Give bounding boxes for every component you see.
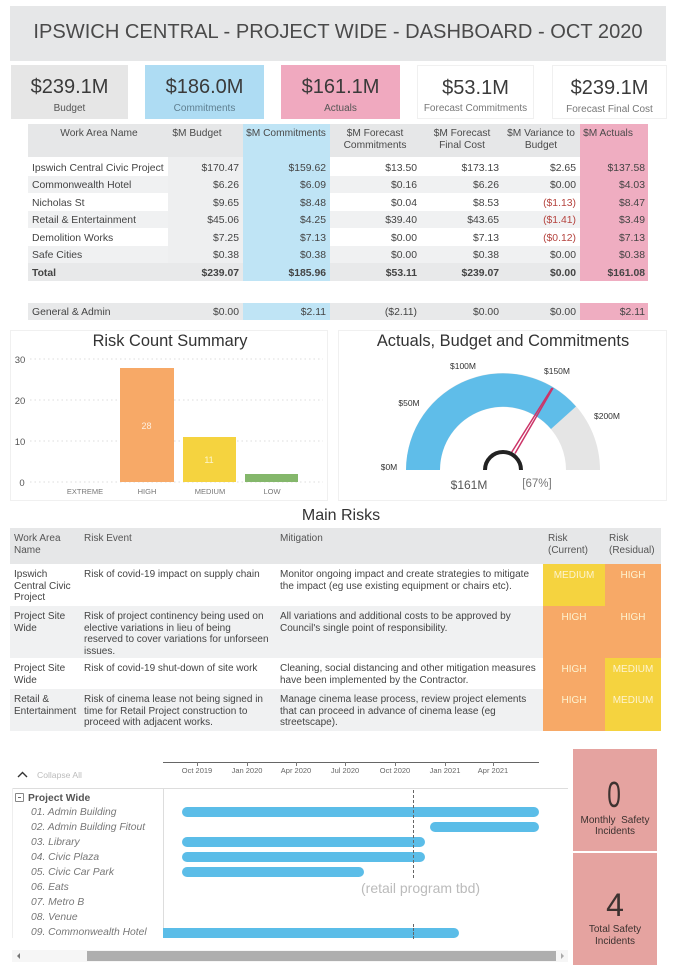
- KPI card: commitments: [145, 65, 264, 119]
- row: Total: $53.11: [386, 268, 417, 279]
- risk row 3: [14, 658, 661, 689]
- row: Safe Cities: $0.00: [391, 250, 417, 261]
- risk row 4: Entertainment: [14, 706, 76, 716]
- table header: $M Commitments: [246, 128, 326, 139]
- risk row 3: Cleaning, social distancing and other mitigation measures: [280, 663, 536, 674]
- timeline labels: Jan 2021: [430, 766, 460, 775]
- risk row 1: Risk of covid-19 impact on supply chain: [84, 569, 260, 580]
- row: Ipswich Central Civic Project: $137.58: [607, 163, 645, 174]
- risk row 4: Manage cinema lease process, review project elements: [280, 694, 526, 705]
- risk row 2: Wide: [14, 622, 37, 634]
- row: Safe Cities: $0.38: [213, 250, 239, 261]
- bar: HIGH 28: 28: [141, 421, 152, 431]
- table header: Final Cost: [439, 140, 485, 150]
- heading: Main Risks: Main Risks: [302, 507, 380, 524]
- risk table header: Mitigation: [280, 533, 323, 544]
- card: total safety incidents: 4: [606, 887, 624, 923]
- row: Nicholas St: $0.04: [391, 198, 417, 209]
- card: monthly safety incidents: Monthly Safety: [581, 815, 649, 826]
- table header: $M Actuals: [583, 128, 633, 139]
- risk row 1: Monitor ongoing impact and create strategies to mitigate: [280, 569, 529, 580]
- table header: $M Forecast: [347, 128, 403, 139]
- bar: MEDIUM 11: [183, 437, 236, 482]
- gauge value arc: [406, 373, 576, 470]
- cost table: [28, 124, 648, 320]
- row: Ipswich Central Civic Project: $2.65: [550, 163, 576, 174]
- note: retail program tbd: (retail program tbd): [361, 880, 480, 896]
- risk row 1: Project: [14, 592, 45, 603]
- row: Ipswich Central Civic Project: Ipswich Central Civic Project: [32, 163, 164, 174]
- risk row 2: Risk of project continency being used on: [84, 611, 264, 622]
- row: Retail & Entertainment: $4.25: [300, 215, 326, 226]
- KPI card: budget: $239.1M: [31, 76, 108, 98]
- KPI card: commitments: $186.0M: [166, 76, 243, 98]
- gantt row labels: 08. Venue: [31, 912, 78, 923]
- y axis labels: 0: [19, 478, 25, 489]
- collapse label: Collapse All: [37, 770, 82, 780]
- gantt row labels: [31, 807, 147, 938]
- risk table header: [14, 533, 655, 556]
- row: General & Admin: [32, 307, 645, 318]
- table header: $M Forecast: [434, 128, 490, 139]
- table header: $M Budget: [172, 128, 222, 139]
- row: Retail & Entertainment: $3.49: [619, 215, 645, 226]
- row: General & Admin: $2.11: [620, 307, 645, 318]
- KPI card: actuals: Actuals: [324, 103, 357, 114]
- gauge needle: [512, 388, 553, 454]
- row: General & Admin: ($2.11): [385, 307, 417, 318]
- gauge percent: [67%]: [522, 478, 552, 490]
- card: total safety incidents: Incidents: [595, 936, 635, 947]
- row: Total: Total: [32, 268, 56, 279]
- row: General & Admin: $0.00: [213, 307, 239, 318]
- x axis labels: EXTREME: [67, 487, 103, 496]
- row: Nicholas St: $8.48: [300, 198, 326, 209]
- bar: MEDIUM 11: 11: [204, 455, 214, 465]
- row: General & Admin: $0.00: [550, 307, 576, 318]
- KPI card: forecast commitments: [417, 65, 534, 119]
- timeline labels: Jan 2020: [232, 766, 262, 775]
- risk row 1: the impact (eg use existing equipment or chairs etc).: [280, 580, 512, 592]
- row: Demolition Works: $7.13: [473, 233, 499, 244]
- timeline labels: Jul 2020: [331, 766, 359, 775]
- risk row 1: Ipswich: [14, 569, 47, 580]
- row: Ipswich Central Civic Project: $13.50: [385, 163, 417, 174]
- row: Ipswich Central Civic Project: [32, 163, 645, 174]
- KPI card: forecast final cost: $239.1M: [571, 77, 648, 99]
- gauge scale labels: $0M: [381, 462, 397, 472]
- timeline labels: [182, 766, 508, 775]
- risk table header: Risk: [548, 533, 567, 544]
- KPI card: actuals: $161.1M: [302, 76, 379, 98]
- risk row 3: Risk of covid-19 shut-down of site work: [84, 663, 257, 674]
- risk table: [10, 528, 661, 731]
- row: Demolition Works: $0.00: [391, 233, 417, 244]
- row: Commonwealth Hotel: $0.16: [391, 180, 417, 191]
- risk row 2: HIGH: [620, 612, 646, 623]
- risk row 2: Council's single point of responsibility.: [280, 622, 447, 634]
- row: Ipswich Central Civic Project: $173.13: [461, 163, 499, 174]
- row: Demolition Works: [32, 233, 645, 244]
- KPI card: forecast commitments: $53.1M: [442, 77, 509, 99]
- row: Retail & Entertainment: $43.65: [467, 215, 499, 226]
- x axis labels: MEDIUM: [195, 487, 225, 496]
- gauge scale labels: $50M: [398, 398, 420, 408]
- row: Nicholas St: $8.47: [619, 198, 645, 209]
- risk row 4: Retail &: [14, 694, 49, 705]
- card: monthly safety incidents: 0: [607, 774, 621, 815]
- risk row 4: that can proceed in advance of cinema lease (eg: [280, 706, 496, 716]
- bar: LOW: [245, 474, 298, 482]
- gantt row labels: 01. Admin Building: [31, 807, 116, 818]
- risk row 4: time for Retail Project construction to: [84, 706, 247, 716]
- row: Safe Cities: $0.00: [550, 250, 576, 261]
- risk row 2: issues.: [84, 646, 115, 656]
- gauge hub: [485, 452, 521, 470]
- risk table header: Risk Event: [84, 533, 132, 544]
- risk table header: Name: [14, 544, 41, 556]
- gantt row labels: 03. Library: [31, 837, 80, 848]
- row: Ipswich Central Civic Project: $170.47: [201, 163, 239, 174]
- table header: Budget: [525, 140, 557, 150]
- gantt row labels: 06. Eats: [31, 882, 69, 893]
- risk row 2: HIGH: [562, 612, 586, 623]
- gauge scale labels: [381, 361, 620, 472]
- timeline labels: Oct 2019: [182, 766, 212, 775]
- gauge scale labels: $200M: [594, 411, 620, 421]
- risk row 1: Central Civic: [14, 580, 71, 592]
- panel: risk count summary: [10, 330, 328, 501]
- risk row 1: HIGH: [620, 570, 646, 581]
- row: Nicholas St: $9.65: [213, 198, 239, 209]
- row: Commonwealth Hotel: $4.03: [619, 180, 645, 191]
- KPI card: forecast commitments: Forecast Commitments: [424, 103, 527, 114]
- KPI card: forecast final cost: [552, 65, 667, 119]
- row: Demolition Works: Demolition Works: [32, 233, 113, 244]
- gauge scale labels: $100M: [450, 361, 476, 371]
- risk table header: Work Area: [14, 533, 60, 544]
- bar: HIGH 28: [120, 368, 174, 482]
- KPI card: budget: [11, 65, 128, 119]
- row: Nicholas St: $8.53: [473, 198, 499, 209]
- KPI card: commitments: Commitments: [174, 103, 235, 114]
- risk row 3: have been implemented by the Contractor.: [280, 674, 468, 686]
- title: [10, 6, 666, 61]
- row: Retail & Entertainment: $45.06: [207, 215, 239, 226]
- risk table header: Risk: [609, 533, 628, 544]
- row: Commonwealth Hotel: $6.09: [300, 180, 326, 191]
- risk row 1: MEDIUM: [554, 570, 594, 581]
- risk table header: (Current): [548, 544, 588, 556]
- y axis labels: 20: [15, 396, 25, 407]
- risk row 4: [14, 689, 661, 731]
- card: total safety incidents: Total Safety: [589, 924, 641, 935]
- row: Safe Cities: $0.38: [619, 250, 645, 261]
- card: total safety incidents: [573, 853, 657, 965]
- row: General & Admin: $0.00: [473, 307, 499, 318]
- risk row 1: [14, 564, 661, 606]
- row: Nicholas St: Nicholas St: [32, 198, 85, 209]
- today marker: [413, 790, 414, 878]
- KPI card: budget: Budget: [54, 103, 85, 114]
- row: Safe Cities: $0.38: [473, 250, 499, 261]
- risk row 2: elective variations in lieu of being: [84, 622, 231, 634]
- card: monthly safety incidents: Incidents: [595, 826, 635, 837]
- row: Safe Cities: Safe Cities: [32, 250, 82, 261]
- row: Nicholas St: ($1.13): [543, 198, 576, 209]
- y axis labels: 10: [15, 437, 25, 448]
- risk row 2: Project Site: [14, 611, 65, 622]
- row: Commonwealth Hotel: $6.26: [213, 180, 239, 191]
- row: Commonwealth Hotel: Commonwealth Hotel: [32, 180, 131, 191]
- row: Demolition Works: $7.13: [300, 233, 326, 244]
- row: Retail & Entertainment: $39.40: [385, 215, 417, 226]
- risk row 2: [14, 606, 661, 658]
- risk row 2: reserved to cover variations for unforseen: [84, 634, 269, 645]
- gantt row labels: 07. Metro B: [31, 897, 84, 908]
- row: Ipswich Central Civic Project: $159.62: [288, 163, 326, 174]
- panel: gantt programme: [12, 762, 568, 962]
- row: Retail & Entertainment: ($1.41): [543, 215, 576, 226]
- row: Commonwealth Hotel: [32, 180, 645, 191]
- row: Safe Cities: $0.38: [300, 250, 326, 261]
- timeline labels: Apr 2020: [281, 766, 311, 775]
- risk row 4: proceed with adjacent works.: [84, 717, 213, 728]
- row: Commonwealth Hotel: $6.26: [473, 180, 499, 191]
- risk row 4: streetscape).: [280, 717, 338, 728]
- risk row 3: Wide: [14, 674, 37, 686]
- risk row 4: MEDIUM: [613, 695, 653, 706]
- row: Demolition Works: ($0.12): [543, 233, 576, 244]
- KPI card: forecast final cost: Forecast Final Cost: [566, 104, 653, 115]
- y axis labels: 30: [15, 355, 25, 366]
- heading: Actuals, Budget and Commitments: Actuals, Budget and Commitments: [377, 332, 629, 350]
- expand box icon: [15, 793, 24, 802]
- collapse icon: [18, 772, 28, 778]
- row: Total: $0.00: [550, 268, 576, 279]
- row: Retail & Entertainment: [32, 215, 645, 226]
- row: Nicholas St: [32, 198, 645, 209]
- gantt row labels: 04. Civic Plaza: [31, 852, 99, 863]
- row: Total: [32, 268, 645, 279]
- heading: Risk Count Summary: Risk Count Summary: [93, 332, 248, 350]
- table header: $M Variance to: [507, 128, 575, 139]
- KPI card: actuals: [281, 65, 400, 119]
- gantt row labels: 02. Admin Building Fitout: [31, 822, 145, 833]
- row: General & Admin: General & Admin: [32, 307, 111, 318]
- scrollbar: [12, 950, 568, 962]
- card: monthly safety incidents: [573, 749, 657, 851]
- risk row 4: Risk of cinema lease not being signed in: [84, 694, 263, 705]
- risk row 3: Project Site: [14, 663, 65, 674]
- timeline axis: [163, 762, 539, 763]
- x axis labels: LOW: [263, 487, 281, 496]
- panel: actuals, budget and commitments gauge: [338, 330, 667, 501]
- today marker lower: [413, 924, 414, 939]
- gantt row labels: 09. Commonwealth Hotel: [31, 927, 147, 938]
- row: Total: $239.07: [201, 268, 239, 279]
- gantt bars: [163, 807, 539, 938]
- row: Safe Cities: [32, 250, 645, 261]
- gauge track: [406, 373, 600, 470]
- table header: Commitments: [344, 140, 406, 150]
- row: General & Admin: $2.11: [301, 307, 326, 318]
- gauge scale labels: $150M: [544, 366, 570, 376]
- x axis labels: HIGH: [138, 487, 156, 496]
- risk row 3: HIGH: [562, 664, 586, 675]
- risk row 3: MEDIUM: [613, 664, 653, 675]
- table header: Work Area Name: [60, 128, 138, 139]
- row: Demolition Works: $7.13: [619, 233, 645, 244]
- title: IPSWICH CENTRAL - PROJECT WIDE - DASHBOARD - OCT 2020: [33, 21, 643, 43]
- row: Total: $239.07: [461, 268, 499, 279]
- table header: [60, 128, 633, 150]
- gauge value: $161M: [451, 478, 487, 492]
- gantt row labels: 05. Civic Car Park: [31, 867, 114, 878]
- row: Total: $185.96: [288, 268, 326, 279]
- row: Retail & Entertainment: Retail & Entertainment: [32, 215, 136, 226]
- row: Commonwealth Hotel: $0.00: [550, 180, 576, 191]
- x axis labels: [67, 487, 281, 496]
- group heading: Project Wide: Project Wide: [28, 793, 90, 804]
- y axis labels: [15, 355, 25, 489]
- risk row 4: HIGH: [562, 695, 586, 706]
- risk table header: (Residual): [609, 544, 655, 556]
- timeline labels: Apr 2021: [478, 766, 508, 775]
- row: Total: $161.08: [607, 268, 645, 279]
- timeline labels: Oct 2020: [380, 766, 410, 775]
- risk row 2: All variations and additional costs to be approved by: [280, 611, 511, 622]
- row: Demolition Works: $7.25: [213, 233, 239, 244]
